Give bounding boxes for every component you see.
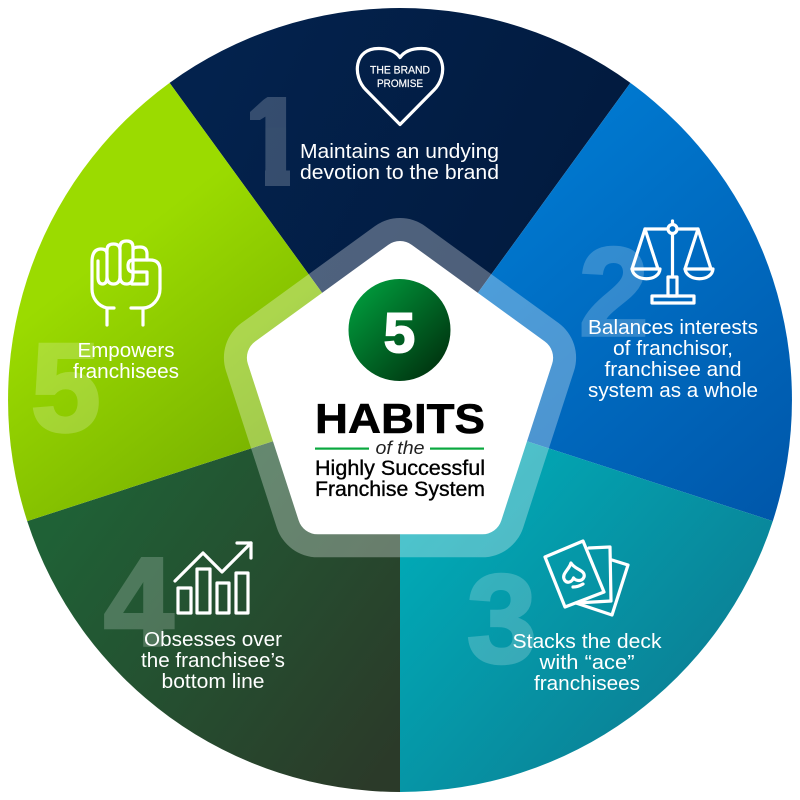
subheading: system name: Highly Successful [315,457,485,480]
text: habit 3: franchisees [534,672,640,695]
number 1: 1 [238,73,308,212]
icon: growth chart [175,543,251,613]
icon: brand promise heart: THE BRAND [370,64,430,76]
panel: center pentagon [267,261,533,514]
icon: raised fist [92,241,160,325]
icon: playing cards [545,541,628,615]
subheading: system name: Franchise System [315,478,485,501]
text: habit 2: Balances interests [588,316,758,339]
number 5: 5 [31,319,101,458]
subheading: system name [315,457,485,501]
text: habit 5: franchisees [73,360,179,383]
icon: brand promise heart [357,48,443,124]
text: habit 1: Maintains an undying [300,140,499,163]
text: habit 2 [588,316,758,402]
icon: brand promise heart: PROMISE [377,78,423,90]
text: habit 5 [73,339,179,383]
text: habit 1 [300,140,499,184]
text: habit 2: franchisee and [604,358,742,381]
text: habit 4: bottom line [162,670,264,693]
panel: habit 2 wedge [400,83,792,521]
heading: habits: HABITS [315,395,485,442]
panel: habit 5 wedge [8,83,400,521]
icon: balance scales [632,221,713,303]
text: habit 2: of franchisor, [613,337,733,360]
badge: number 5 [348,279,450,381]
panel: habit 1 wedge [170,8,630,293]
text: habit 4 [141,628,285,693]
text: habit 4: Obsesses over [144,628,282,651]
panel: habit 3 wedge [400,400,773,792]
number 4: 4 [104,533,174,672]
panel: habit 4 wedge [27,400,400,792]
text: habit 3 [512,630,662,695]
text: habit 5: Empowers [78,339,174,362]
number 3: 3 [467,550,537,689]
text: habit 3: with “ace” [538,651,635,674]
text: habit 2: system as a whole [588,379,758,402]
badge: number 5: 5 [384,301,415,364]
translucent pentagon ring [267,261,533,514]
text: habit 1: devotion to the brand [300,161,499,184]
text: habit 3: Stacks the deck [512,630,662,653]
number 2: 2 [579,223,649,362]
text: habit 4: the franchisee’s [141,649,285,672]
subheading: of the with rules: of the [376,438,424,458]
